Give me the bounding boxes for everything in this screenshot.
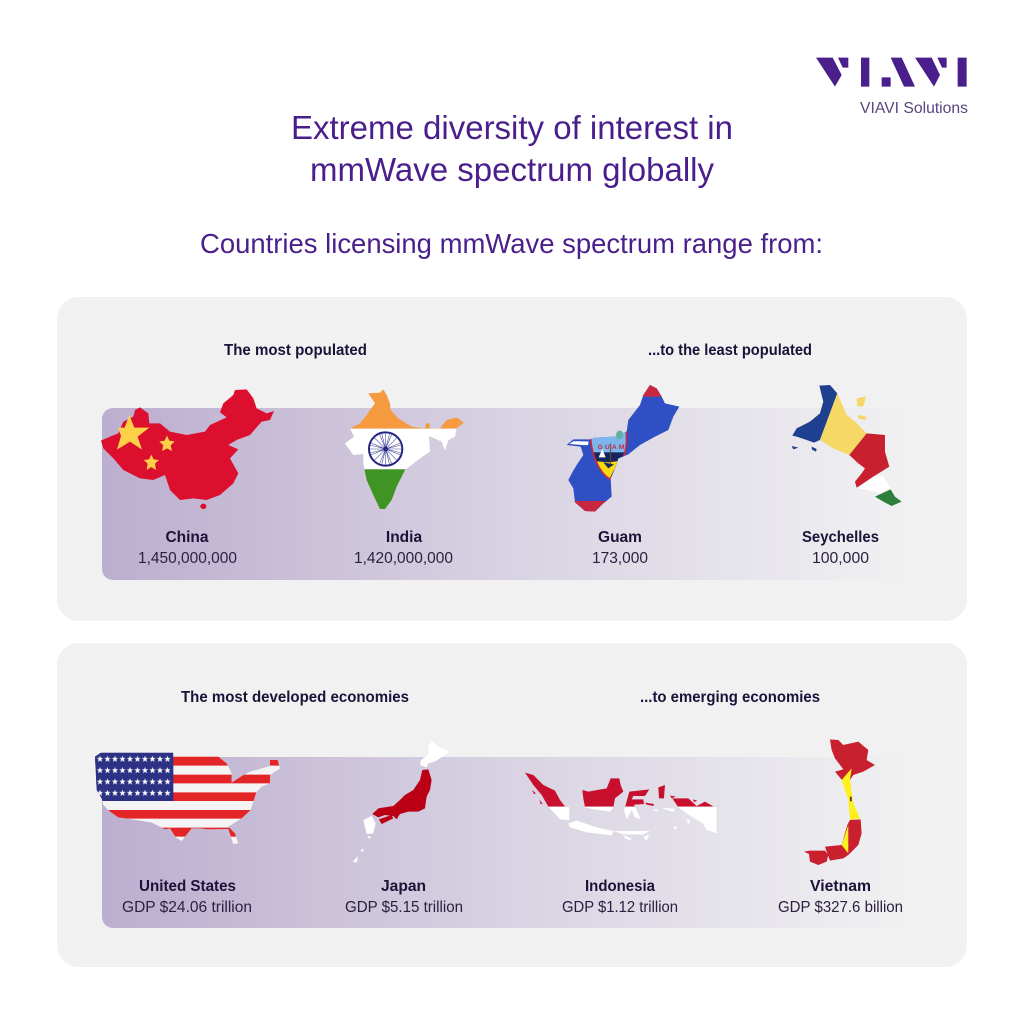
map: Seychelles flag (792, 385, 902, 506)
label: Indonesia: Indonesia (585, 878, 655, 895)
label: Vietnam (778, 878, 903, 916)
label: Seychelles (802, 529, 879, 567)
label: United States (122, 878, 252, 916)
label: Vietnam: GDP $327.6 billion (778, 899, 903, 916)
logo text: VIAVI Solutions (860, 100, 968, 117)
map: China flag (101, 389, 274, 509)
label: Guam (592, 529, 648, 567)
panel background (57, 643, 967, 967)
heading: most populated: The most populated (224, 342, 367, 359)
logo mark (816, 58, 967, 87)
label: United States: GDP $24.06 trillion (122, 899, 252, 916)
map: India flag (343, 387, 467, 511)
title: Extreme diversity of interest in (291, 109, 733, 146)
label: Guam: Guam (598, 529, 642, 546)
heading: least populated: ...to the least populated (648, 342, 812, 359)
label: India: 1,420,000,000 (354, 550, 453, 567)
gradient band (102, 757, 910, 928)
title (291, 109, 733, 188)
map: Indonesia flag (525, 772, 716, 840)
label: China (138, 529, 237, 567)
label: India (354, 529, 453, 567)
label: Indonesia (562, 878, 678, 916)
heading: emerging: ...to emerging economies (640, 689, 820, 706)
label: Indonesia: GDP $1.12 trillion (562, 899, 678, 916)
map: Japan flag (353, 740, 450, 863)
subtitle: Countries licensing mmWave spectrum range from: (200, 228, 823, 259)
map: Guam flag (566, 385, 680, 512)
panel: economies (57, 643, 967, 967)
label: Japan (345, 878, 463, 916)
label: Guam: 173,000 (592, 550, 648, 567)
map: Guam flag: GUAM (598, 444, 625, 451)
map: Vietnam flag (804, 739, 875, 865)
label: China: 1,450,000,000 (138, 550, 237, 567)
label: Japan: Japan (381, 878, 426, 895)
panel background (57, 297, 967, 621)
label: India: India (386, 529, 422, 546)
title: mmWave spectrum globally (310, 151, 714, 188)
logo: VIAVI Solutions (816, 58, 968, 117)
label: United States: United States (139, 878, 236, 895)
panel: population (57, 297, 967, 621)
gradient band (102, 408, 910, 580)
heading: most developed: The most developed economies (181, 689, 409, 706)
label: China: China (165, 529, 209, 546)
label: Vietnam: Vietnam (810, 878, 871, 895)
label: Seychelles: 100,000 (812, 550, 869, 567)
label: Japan: GDP $5.15 trillion (345, 899, 463, 916)
label: Seychelles: Seychelles (802, 529, 879, 546)
map: United States flag (95, 752, 280, 844)
